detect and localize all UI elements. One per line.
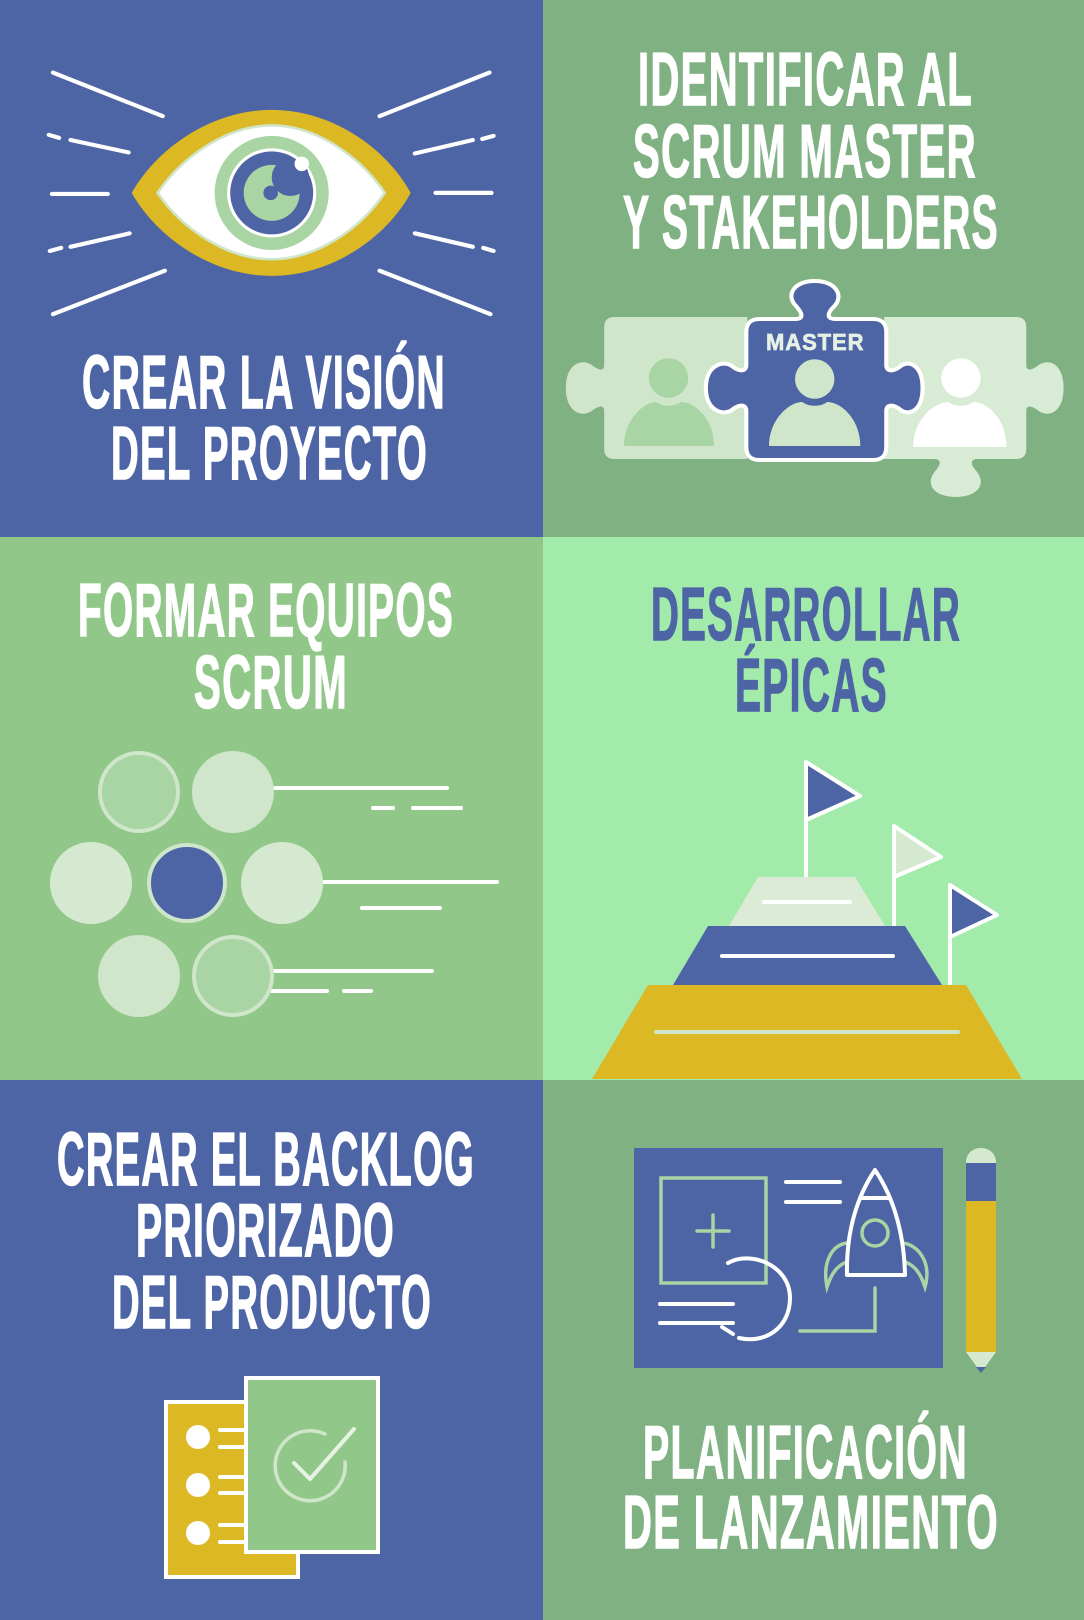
icon: pencil — [966, 1148, 996, 1373]
heading: SCRUM — [194, 640, 348, 724]
heading — [651, 572, 961, 727]
panel: crear el backlog — [0, 1080, 543, 1620]
icon: rocket plan board — [634, 1148, 943, 1368]
icon: master puzzle piece — [706, 281, 923, 460]
icon: left puzzle piece — [566, 317, 747, 459]
icon: master puzzle piece: MASTER — [766, 329, 865, 355]
icon: eye with rays — [49, 73, 494, 314]
panel: formar equipos scrum — [0, 537, 543, 1080]
heading — [623, 1410, 999, 1564]
heading: DEL PROYECTO — [111, 411, 428, 495]
heading: CREAR LA VISIÓN — [82, 340, 446, 424]
panel: crear la visión — [0, 0, 543, 537]
panel: planificación de lanzamiento — [543, 1080, 1084, 1620]
heading: PRIORIZADO — [136, 1188, 395, 1272]
icon: backlog documents — [166, 1378, 378, 1577]
heading — [78, 568, 454, 724]
icon: flags on pyramid — [592, 762, 1022, 1079]
icon: team circles — [50, 751, 497, 1017]
heading: DEL PRODUCTO — [112, 1260, 432, 1344]
heading — [623, 37, 999, 264]
panel: identificar al scrum master — [543, 0, 1084, 537]
heading — [57, 1117, 475, 1344]
heading: CREAR EL BACKLOG — [57, 1117, 475, 1201]
heading — [82, 340, 446, 495]
panel: desarrollar épicas — [543, 537, 1084, 1080]
heading: FORMAR EQUIPOS — [78, 568, 454, 652]
heading: ÉPICAS — [735, 643, 888, 727]
icon: right puzzle piece — [884, 317, 1064, 497]
